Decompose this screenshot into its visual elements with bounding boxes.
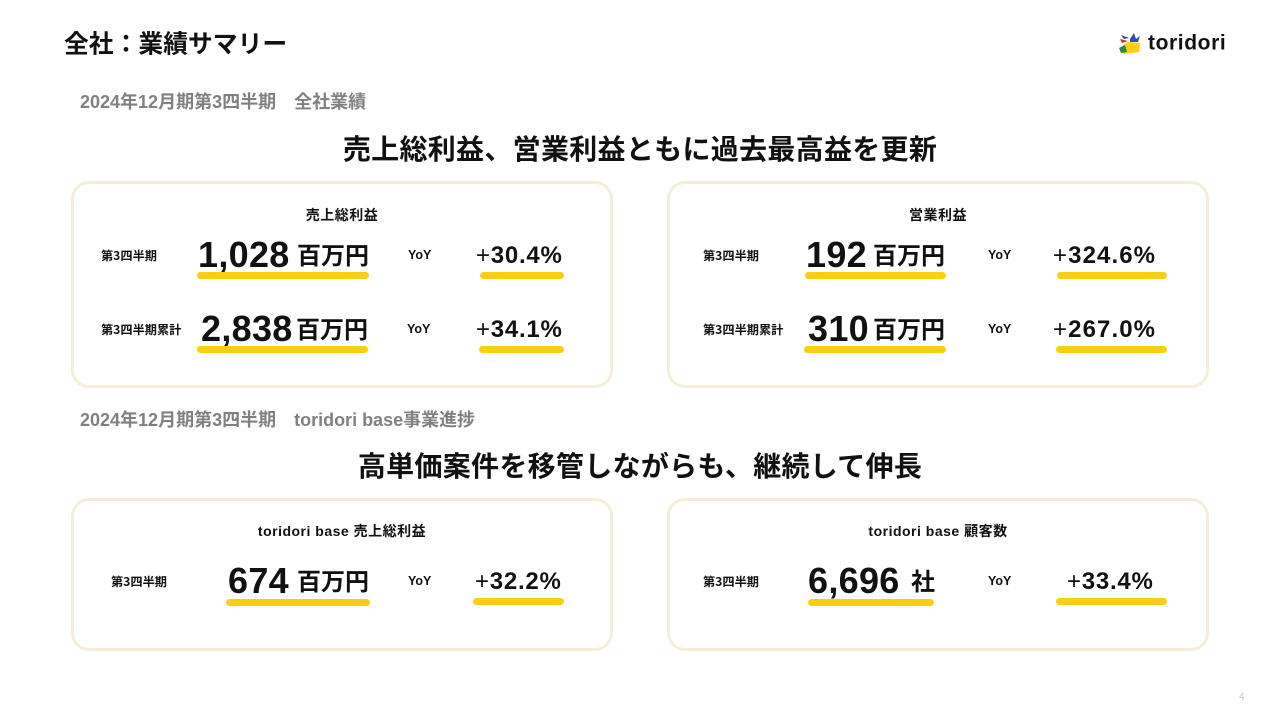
- YoY label: YoY: [988, 248, 1011, 262]
- panel: toridori base gross profit: [71, 498, 613, 651]
- panel: operating profit: [667, 181, 1209, 388]
- YoY underline: [480, 272, 564, 279]
- cumulative value: 2,838: [201, 308, 293, 349]
- card title: 営業利益: [909, 207, 967, 223]
- Q3 value: 192: [806, 234, 867, 275]
- YoY label: YoY: [408, 574, 431, 588]
- logo: toridori: toridori: [1148, 32, 1226, 54]
- Q3 label: 第3四半期: [703, 572, 759, 590]
- YoY value: +33.4%: [1067, 568, 1154, 595]
- cumulative value: 310: [808, 308, 869, 349]
- YoY label: YoY: [988, 574, 1011, 588]
- panel: gross profit: [71, 181, 613, 388]
- toridori base customers content: [703, 523, 1167, 606]
- Q3 unit: 社: [911, 562, 935, 597]
- gross profit content: [101, 207, 564, 353]
- subheading: company results: 2024年12月期第3四半期 全社業績: [80, 92, 366, 112]
- YoY label: YoY: [408, 248, 431, 262]
- YoY underline: [473, 598, 564, 605]
- YoY label: YoY: [988, 322, 1011, 336]
- Q3 unit: 百万円: [873, 236, 945, 271]
- YoY underline: [1056, 346, 1167, 353]
- YoY label: YoY: [407, 322, 430, 336]
- YoY value: +30.4%: [476, 242, 563, 269]
- Q3 label: 第3四半期: [703, 246, 759, 264]
- YoY value: +324.6%: [1053, 242, 1156, 269]
- cumulative unit: 百万円: [873, 310, 945, 345]
- card title: toridori base 顧客数: [868, 523, 1008, 539]
- cumulative underline: [804, 346, 946, 353]
- cumulative underline: [197, 346, 368, 353]
- Q3 underline: [197, 272, 369, 279]
- Q3 unit: 百万円: [297, 236, 369, 271]
- page number: 4: [1239, 688, 1245, 703]
- Q3 value: 674: [228, 560, 289, 601]
- YoY value: +32.2%: [475, 568, 562, 595]
- heading: record profits: 売上総利益、営業利益ともに過去最高益を更新: [343, 128, 937, 168]
- cumulative label: 第3四半期累計: [101, 320, 181, 338]
- cumulative label: 第3四半期累計: [703, 320, 783, 338]
- YoY value: +267.0%: [1053, 316, 1156, 343]
- Q3 underline: [805, 272, 946, 279]
- YoY underline: [1057, 272, 1167, 279]
- Q3 value: 1,028: [198, 234, 290, 275]
- YoY underline: [1056, 598, 1167, 605]
- Q3 underline: [226, 599, 370, 606]
- YoY underline: [479, 346, 564, 353]
- heading: continued growth: 高単価案件を移管しながらも、継続して伸長: [358, 445, 922, 485]
- Q3 label: 第3四半期: [111, 572, 167, 590]
- Q3 value: 6,696: [808, 560, 900, 601]
- toridori base gross profit content: [111, 523, 564, 606]
- Q3 label: 第3四半期: [101, 246, 157, 264]
- Q3 underline: [808, 599, 934, 606]
- subheading: toridori base progress: 2024年12月期第3四半期 toridori base事業進捗: [80, 410, 475, 430]
- card title: toridori base 売上総利益: [258, 523, 426, 539]
- card title: 売上総利益: [306, 207, 378, 223]
- panel: toridori base customers: [667, 498, 1209, 651]
- operating profit content: [703, 207, 1167, 353]
- YoY value: +34.1%: [476, 316, 563, 343]
- Q3 unit: 百万円: [297, 562, 369, 597]
- cumulative unit: 百万円: [296, 310, 368, 345]
- title: 全社：業績サマリー: [64, 25, 287, 61]
